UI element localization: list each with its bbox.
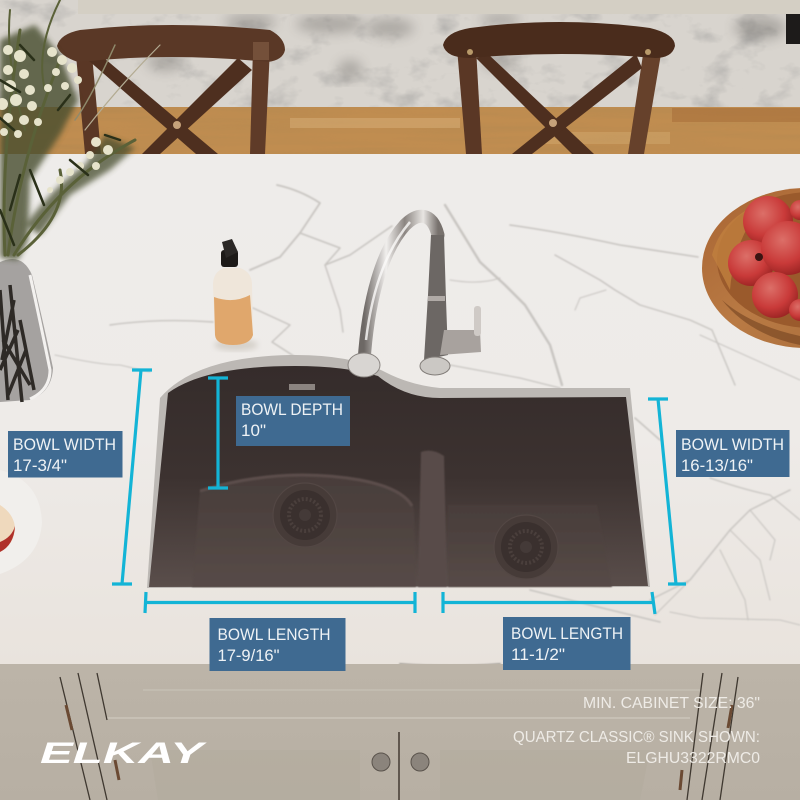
label: bowl depth: 10": [241, 422, 266, 440]
label: bowl width right: 16-13/16": [681, 457, 753, 475]
faucet body: [424, 235, 448, 360]
label: bowl width left: BOWL WIDTH: [13, 436, 116, 454]
label: bowl length right: BOWL LENGTH: [511, 625, 623, 643]
cabinet gaps left: [60, 673, 107, 800]
cabinet size and model text: MIN. CABINET SIZE: 36": [583, 695, 760, 712]
label: bowl depth: BOWL DEPTH: [241, 401, 343, 419]
bench seat: [78, 0, 800, 44]
divider: [418, 451, 447, 587]
countertop: [0, 154, 800, 664]
left bowl floor: [192, 475, 416, 587]
plate with apple slice: [0, 470, 42, 574]
drawer line: [106, 717, 690, 719]
label: bowl length left: BOWL LENGTH: [218, 626, 330, 644]
label: bowl length right: 11-1/2": [511, 646, 565, 664]
label: bowl width left: [8, 431, 122, 478]
right bowl lip: [448, 504, 597, 506]
wood floor: [0, 107, 800, 155]
label: bowl length left: 17-9/16": [218, 647, 280, 665]
faucet: [348, 216, 481, 377]
dimension: left bowl width: [112, 370, 152, 584]
overflow badge: [289, 384, 315, 390]
dimension: bowl depth: [208, 378, 228, 488]
marble veins: [55, 185, 800, 671]
label: bowl width left: 17-3/4": [13, 457, 67, 475]
cabinet size and model text: [513, 695, 760, 767]
plant foliage mass: [0, 25, 78, 260]
label: bowl length left: [210, 618, 346, 671]
spout: [364, 216, 438, 362]
background: rug: [0, 0, 800, 108]
label: bowl length right: [503, 617, 630, 670]
lower cabinets: [0, 664, 800, 800]
faucet base: [420, 357, 450, 375]
sink: [147, 355, 650, 588]
chair left: [57, 25, 285, 154]
chair right: [443, 22, 675, 154]
cabinet size and model text: ELGHU3322RMC0: [626, 750, 760, 767]
label: bowl width right: BOWL WIDTH: [681, 436, 784, 454]
dimension: left bowl length: [145, 592, 415, 613]
fruit bowl: [702, 188, 800, 348]
sink basin: [149, 366, 648, 587]
logo: Elkay: ELKAY: [40, 737, 208, 770]
handle: [440, 330, 481, 355]
knob right: [411, 753, 429, 771]
left drain: [273, 483, 337, 547]
right bowl floor: [448, 505, 612, 587]
plant with white flowers: [0, 0, 160, 260]
dimension: right bowl length: [443, 592, 655, 614]
lower flower branch foliage: [25, 135, 135, 235]
cabinet size and model text: QUARTZ CLASSIC® SINK SHOWN:: [513, 729, 760, 746]
soap dispenser: [213, 239, 258, 351]
right drain: [494, 515, 558, 579]
label: bowl depth: [236, 396, 350, 446]
left bowl lip: [200, 475, 412, 506]
spout base: [348, 353, 380, 377]
vase with stems: [0, 259, 53, 402]
cabinet gaps right: [687, 673, 738, 800]
label: bowl width right: [676, 430, 790, 477]
sink rim: [147, 355, 650, 588]
knob left: [372, 753, 390, 771]
dimension: right bowl width: [648, 399, 686, 584]
